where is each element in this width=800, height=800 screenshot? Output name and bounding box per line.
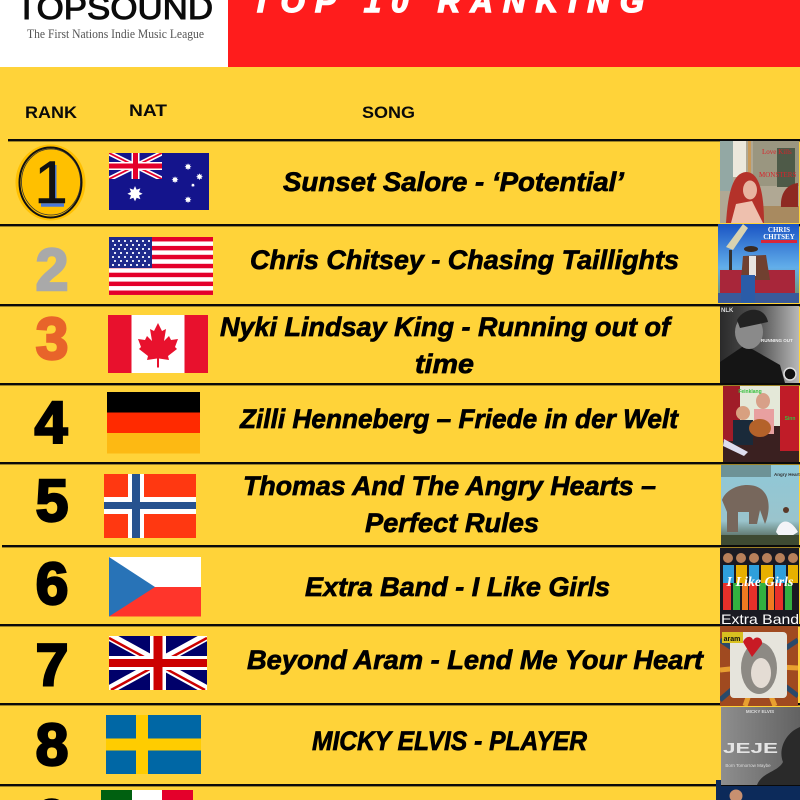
rank 3: 3 xyxy=(36,306,68,372)
flag: Norway xyxy=(104,474,196,538)
song 7: Beyond Aram - Lend Me Your Heart xyxy=(247,645,704,675)
flag: Australia: ✸ xyxy=(184,196,192,206)
album cover 2: CHITSEY xyxy=(763,233,795,241)
flag: Australia: ✸ xyxy=(127,182,143,206)
rank 1 medal xyxy=(16,144,86,220)
album cover 4: Sinn xyxy=(785,416,795,422)
album cover 9 xyxy=(716,780,800,800)
album cover 4: Feinklang xyxy=(738,389,762,395)
album cover 7 xyxy=(720,626,798,706)
title banner xyxy=(228,0,800,67)
column headings: SONG xyxy=(362,103,415,122)
album cover 6 xyxy=(720,548,799,627)
song 3 xyxy=(220,316,673,374)
flag: Australia: ✸ xyxy=(191,183,195,189)
column headings: NAT xyxy=(129,101,168,120)
album cover 2 xyxy=(718,224,799,303)
flag: Canada xyxy=(108,315,208,373)
flag: Australia: ✸ xyxy=(171,176,179,186)
flag: Germany xyxy=(107,392,200,454)
album cover 6: I Like Girls xyxy=(726,575,794,590)
song 1: Sunset Salore - ‘Potential’ xyxy=(283,167,625,197)
flag: United Kingdom xyxy=(109,636,207,690)
album cover 1: MONSTERS xyxy=(759,171,796,179)
flag: Italy xyxy=(101,790,193,800)
flag: Australia: ✸ xyxy=(184,163,192,173)
song 3: Nyki Lindsay King - Running out of xyxy=(220,312,673,342)
album cover 3: NLK xyxy=(721,308,734,314)
flag: Czech Republic xyxy=(109,557,201,616)
column headings xyxy=(26,104,414,118)
album cover 4 xyxy=(723,386,799,462)
column headings: RANK xyxy=(25,103,78,122)
song 4: Zilli Henneberg – Friede in der Welt xyxy=(239,404,679,434)
album cover 6: Extra Band xyxy=(721,611,799,627)
flag: Australia xyxy=(109,153,209,210)
album cover 8: Born Tomorrow Maybe xyxy=(725,763,771,768)
album cover 5 xyxy=(721,465,800,545)
album cover 8 xyxy=(721,707,800,785)
rank 5: 5 xyxy=(36,468,68,534)
rank 4: 4 xyxy=(35,390,68,456)
logo panel xyxy=(0,0,228,67)
song 6: Extra Band - I Like Girls xyxy=(305,572,610,602)
song 5 xyxy=(244,475,656,533)
song 5: Thomas And The Angry Hearts – xyxy=(243,471,656,501)
rank 7: 7 xyxy=(36,632,68,698)
rank 8: 8 xyxy=(36,712,68,778)
song 2: Chris Chitsey - Chasing Taillights xyxy=(250,245,679,275)
song 5: Perfect Rules xyxy=(365,508,539,538)
album cover 1: Love Kills xyxy=(762,148,792,156)
album cover 2: CHRIS xyxy=(768,226,790,234)
album cover 3 xyxy=(720,306,799,383)
logo tagline: The First Nations Indie Music League xyxy=(27,27,204,41)
album cover 8: MICKY ELVIS xyxy=(746,709,774,714)
album cover 7: aram xyxy=(724,636,740,643)
song 8: MICKY ELVIS - PLAYER xyxy=(312,726,587,756)
flag: Sweden xyxy=(106,715,201,774)
flag: Australia: ✸ xyxy=(196,173,204,183)
digit 1: 1 xyxy=(34,149,68,216)
rank 2: 2 xyxy=(36,237,68,303)
album cover 8: JEJE xyxy=(723,740,778,757)
flag: USA xyxy=(109,237,213,295)
rank 6: 6 xyxy=(36,551,68,617)
album cover 1 xyxy=(720,141,799,223)
album cover 3: RUNNING OUT xyxy=(761,338,793,343)
song 3: time xyxy=(415,349,474,379)
